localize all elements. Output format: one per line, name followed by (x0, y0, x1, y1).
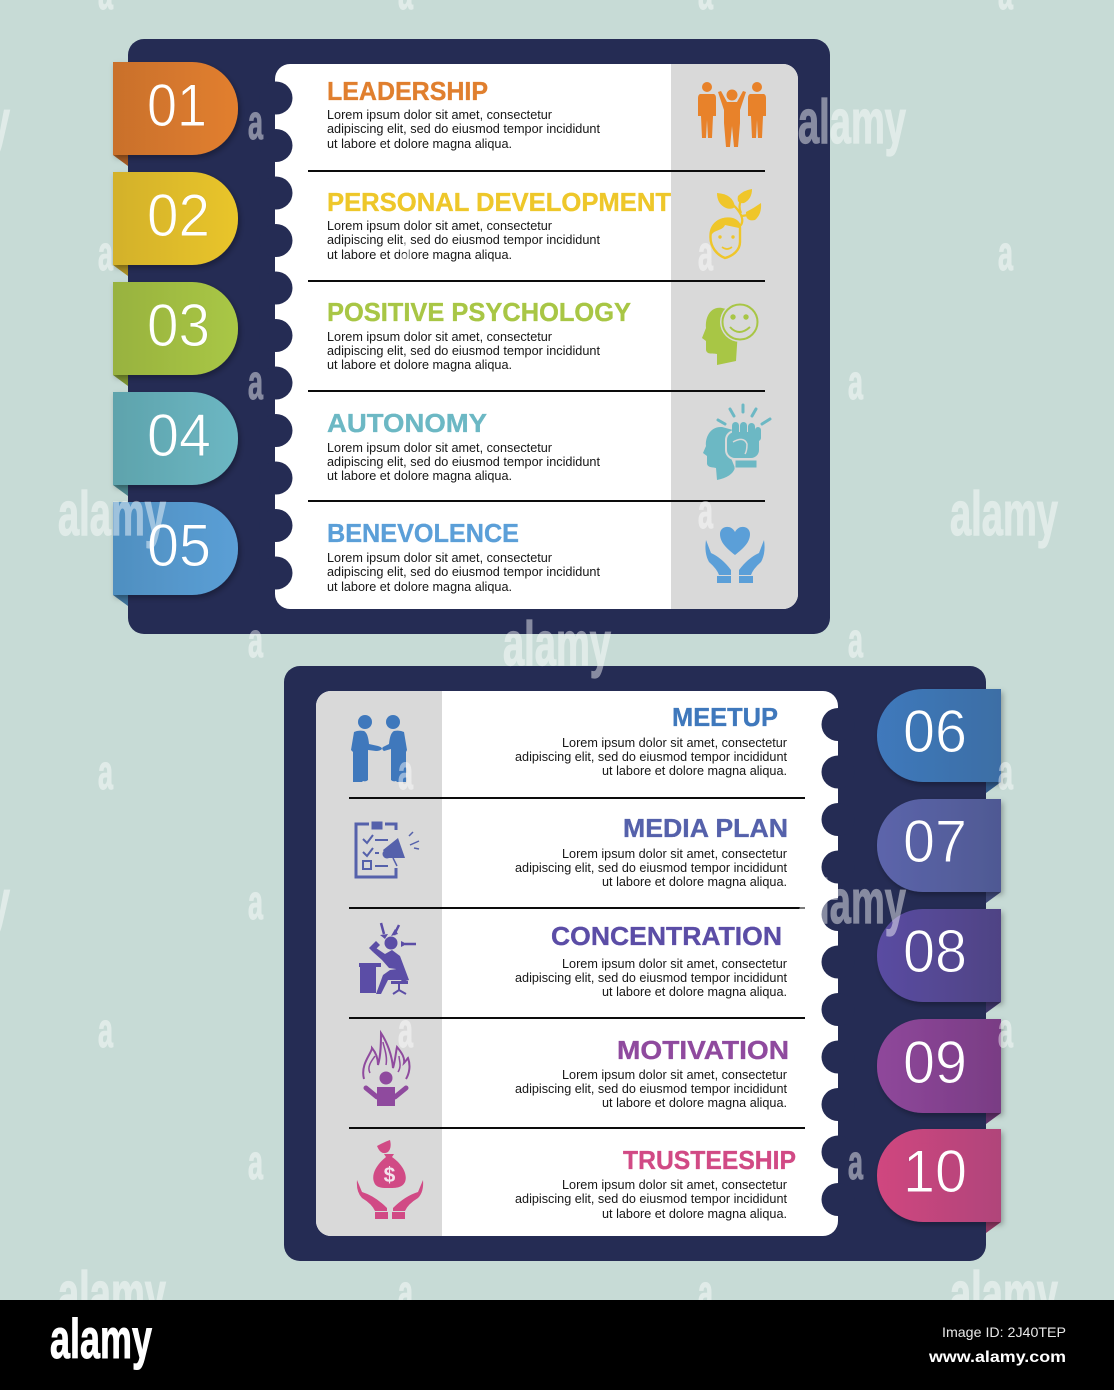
section: leadership text: adipiscing elit, sed do eiusmod tempor incididunt (327, 122, 601, 136)
tab 05 (113, 502, 238, 606)
image id: Image ID: 2J40TEP (942, 1324, 1066, 1340)
tab 06 (877, 689, 1001, 793)
watermarks: a (998, 227, 1013, 281)
section: positive psychology text: ut labore et dolore magna aliqua. (327, 358, 512, 372)
watermarks: a (98, 746, 113, 800)
section: motivation text: ut labore et dolore magna aliqua. (602, 1096, 787, 1110)
watermarks: a (398, 1266, 413, 1320)
watermarks: a (248, 356, 263, 410)
watermarks: alamy (58, 1260, 166, 1329)
watermarks: alamy (58, 480, 166, 549)
section: motivation text: adipiscing elit, sed do eiusmod tempor incididunt (515, 1082, 788, 1096)
section: concentration text: Lorem ipsum dolor sit amet, consectetur (562, 957, 787, 971)
watermarks: a (98, 227, 113, 281)
section: personal development text: Lorem ipsum dolor sit amet, consectetur (327, 219, 552, 233)
watermarks: a (398, 746, 413, 800)
tab 06: 06 (903, 698, 967, 765)
icon: autonomy head with fist (703, 405, 770, 480)
watermarks: a (698, 485, 713, 539)
section: benevolence text (327, 518, 601, 594)
watermarks: a (848, 1136, 863, 1190)
section: personal development text (327, 187, 671, 262)
icon: media plan clipboard and megaphone (356, 822, 419, 877)
section: trusteeship text: adipiscing elit, sed do eiusmod tempor incididunt (515, 1192, 788, 1206)
top panel navy frame (128, 39, 830, 634)
panel: bottom card (284, 666, 986, 1261)
section: leadership text (327, 76, 601, 151)
section: trusteeship text: TRUSTEESHIP (623, 1145, 796, 1175)
section: personal development text: adipiscing elit, sed do eiusmod tempor incididunt (327, 233, 601, 247)
section: trusteeship text: Lorem ipsum dolor sit amet, consectetur (562, 1178, 787, 1192)
top panel scalloped edge (260, 82, 292, 590)
section: concentration text: CONCENTRATION (551, 921, 782, 951)
tab 07: 07 (903, 808, 967, 875)
tab 03: 03 (147, 292, 210, 359)
section: benevolence text: BENEVOLENCE (327, 518, 519, 548)
website: www.alamy.com (928, 1349, 1066, 1366)
section: positive psychology text: POSITIVE PSYCHOLOGY (327, 297, 631, 327)
watermarks: a (98, 1004, 113, 1058)
watermarks: a (998, 1004, 1013, 1058)
tab 05: 05 (147, 512, 211, 579)
section: media plan text: MEDIA PLAN (623, 813, 788, 843)
section: media plan text: ut labore et dolore magna aliqua. (602, 875, 787, 889)
top panel white sheet (275, 64, 798, 609)
section: autonomy text: adipiscing elit, sed do eiusmod tempor incididunt (327, 455, 601, 469)
watermarks: a (398, 1004, 413, 1058)
watermarks: a (698, 227, 713, 281)
watermarks: a (998, 746, 1013, 800)
tab 02 (113, 172, 238, 276)
section: autonomy text: ut labore et dolore magna aliqua. (327, 469, 512, 483)
panel: top card (128, 39, 830, 634)
watermarks: a (248, 96, 263, 150)
tab 09: 09 (903, 1029, 967, 1096)
icon: positive psychology head with smile (702, 302, 760, 365)
section: benevolence text: Lorem ipsum dolor sit amet, consectetur (327, 551, 552, 565)
watermarks: a (248, 1136, 263, 1190)
icon: concentration person at desk (359, 923, 416, 994)
watermarks: a (698, 1266, 713, 1320)
section: benevolence text: ut labore et dolore magna aliqua. (327, 580, 512, 594)
icon: trusteeship money bag and hands (357, 1140, 423, 1219)
watermarks: alamy (798, 868, 906, 937)
section: positive psychology text: adipiscing elit, sed do eiusmod tempor incididunt (327, 344, 601, 358)
tab 04: 04 (147, 402, 211, 469)
watermarks: a (398, 227, 413, 281)
section: leadership text: Lorem ipsum dolor sit amet, consectetur (327, 108, 552, 122)
tab 01 (113, 62, 238, 166)
section: concentration text: ut labore et dolore magna aliqua. (602, 985, 787, 999)
section: trusteeship text: ut labore et dolore magna aliqua. (602, 1207, 787, 1221)
section: personal development text: ut labore et dolore magna aliqua. (327, 248, 512, 262)
tab 10: 10 (903, 1138, 967, 1205)
tab 02: 02 (147, 182, 210, 249)
section: motivation text: MOTIVATION (617, 1035, 789, 1065)
section: leadership text: ut labore et dolore magna aliqua. (327, 137, 512, 151)
watermarks: a (848, 356, 863, 410)
section: autonomy text: Lorem ipsum dolor sit amet, consectetur (327, 441, 552, 455)
bottom panel white sheet (316, 691, 838, 1236)
section: autonomy text: AUTONOMY (327, 408, 487, 438)
icon: meetup handshake (351, 715, 407, 782)
top panel grey icon column (671, 64, 798, 609)
watermarks: alamy (798, 88, 906, 157)
section: personal development text: PERSONAL DEVELOPMENT (327, 187, 671, 217)
section: autonomy text (327, 408, 601, 483)
icon: benevolence heart and hands (705, 527, 765, 583)
footer logo: alamy (50, 1307, 152, 1370)
section: motivation text: Lorem ipsum dolor sit amet, consectetur (562, 1068, 787, 1082)
icon: motivation flames and person (363, 1033, 409, 1106)
section: media plan text: adipiscing elit, sed do eiusmod tempor incididunt (515, 861, 788, 875)
bottom panel navy frame (284, 666, 986, 1261)
watermarks: alamy (503, 610, 611, 679)
section: leadership text: LEADERSHIP (327, 76, 488, 106)
icon: leadership people (698, 82, 766, 147)
section: meetup text: ut labore et dolore magna aliqua. (602, 764, 787, 778)
tab 07 (877, 799, 1001, 903)
section: positive psychology text (327, 297, 631, 372)
watermarks: a (248, 876, 263, 930)
tab 09 (877, 1019, 1001, 1124)
section: trusteeship text (515, 1145, 796, 1221)
section: meetup text: MEETUP (672, 702, 778, 732)
icon: personal development head with leaves (710, 189, 761, 258)
tab 08: 08 (903, 918, 967, 985)
section: meetup text: adipiscing elit, sed do eiusmod tempor incididunt (515, 750, 788, 764)
tab 01: 01 (147, 72, 207, 139)
watermarks: a (848, 614, 863, 668)
section: concentration text (515, 921, 788, 999)
section: meetup text: Lorem ipsum dolor sit amet, consectetur (562, 736, 787, 750)
section: benevolence text: adipiscing elit, sed do eiusmod tempor incididunt (327, 565, 601, 579)
bottom panel scalloped edge (822, 708, 854, 1216)
tab 03 (113, 282, 238, 386)
tab 08 (877, 909, 1001, 1013)
section: concentration text: adipiscing elit, sed do eiusmod tempor incididunt (515, 971, 788, 985)
icon: trusteeship money bag and hands: $ (384, 1164, 396, 1187)
section: motivation text (515, 1035, 789, 1110)
watermarks: a (248, 614, 263, 668)
footer bar (0, 1300, 1114, 1390)
section: media plan text (515, 813, 788, 889)
tab 10 (877, 1129, 1001, 1233)
section: meetup text (515, 702, 788, 778)
bottom panel grey icon column (316, 691, 442, 1236)
section: positive psychology text: Lorem ipsum dolor sit amet, consectetur (327, 330, 552, 344)
section: media plan text: Lorem ipsum dolor sit amet, consectetur (562, 847, 787, 861)
tab 04 (113, 392, 238, 496)
